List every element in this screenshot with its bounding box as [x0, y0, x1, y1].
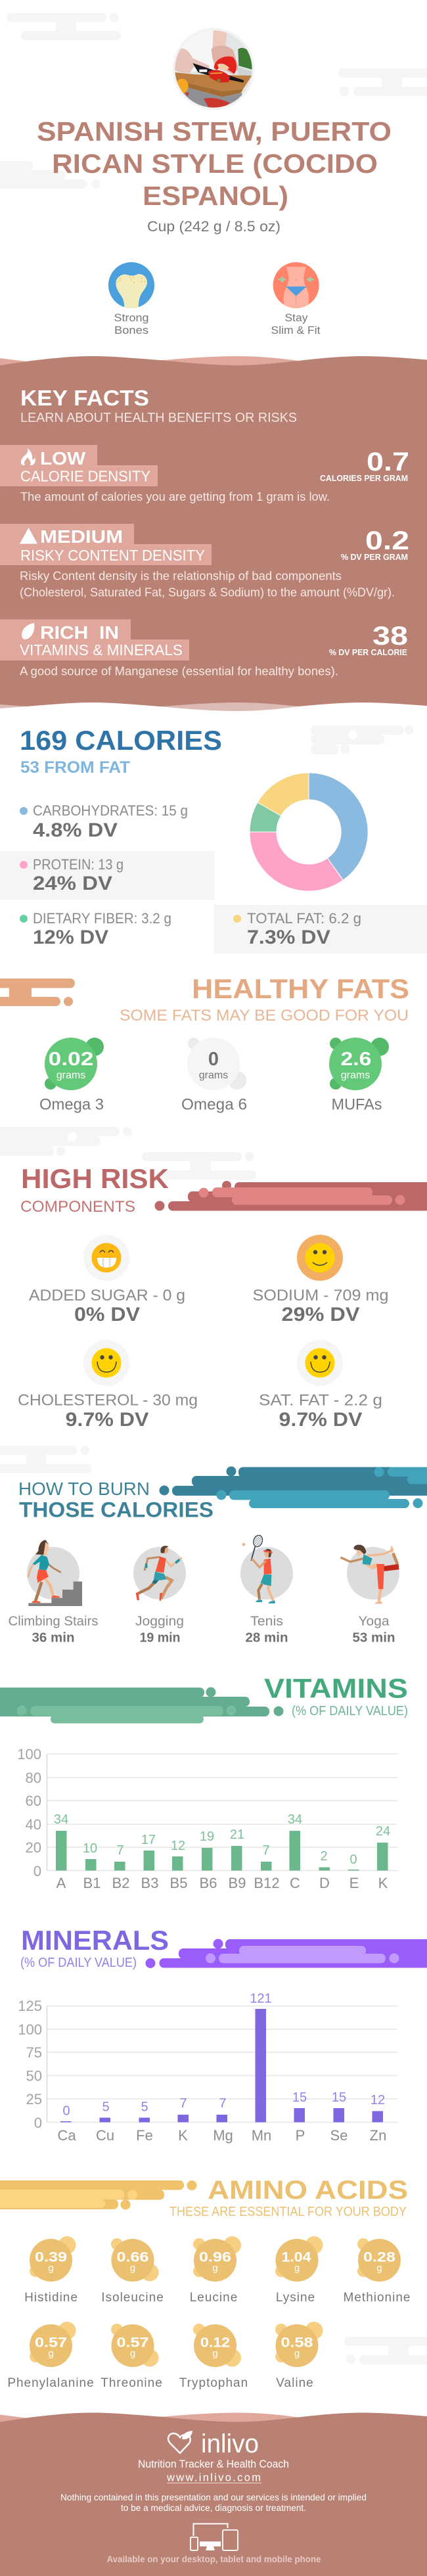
- disclaimer: to be a medical advice, diagnosis or treatment.: [121, 2502, 306, 2513]
- subheading: healthy fats: SOME FATS MAY BE GOOD FOR YOU: [120, 1007, 409, 1024]
- amino acid: threonine: Threonine: [101, 2376, 163, 2390]
- risk item: saturated fat: 9.7% DV: [279, 1409, 363, 1431]
- amino acid: tryptophan: g: [212, 2348, 218, 2359]
- bar chart: vitamins: B3: [141, 1875, 158, 1891]
- heading: key facts: KEY FACTS: [20, 386, 149, 410]
- amino acid: methionine: [344, 2238, 411, 2305]
- heading: amino acids: AMINO ACIDS: [208, 2176, 408, 2205]
- decoration: healthy fats: [0, 978, 75, 1006]
- decoration: amino acids: [0, 2180, 197, 2209]
- value: calories per gram: 0.7: [367, 448, 409, 476]
- band: rich in vitamins and minerals: VITAMINS & MINERALS: [20, 641, 183, 658]
- description: risky content: Risky Content density is the relationship of bad components: [20, 569, 342, 582]
- label: slim and fit: Slim & Fit: [271, 324, 321, 336]
- heading: 169 calories: 169 CALORIES: [20, 725, 222, 756]
- band: rich in vitamins and minerals: RICH IN: [40, 622, 119, 643]
- label: strong bones: Strong: [114, 311, 148, 324]
- description: risky content: [20, 569, 395, 599]
- amino acid: tryptophan: [179, 2324, 248, 2390]
- description: calorie density: The amount of calories you are getting from 1 gram is low.: [20, 490, 330, 503]
- heading: high risk: HIGH RISK: [21, 1163, 169, 1194]
- amino acid: phenylalanine: Phenylalanine: [7, 2376, 95, 2390]
- badge: omega 3: 0.02: [49, 1049, 93, 1070]
- decoration: vitamins: [0, 1688, 284, 1723]
- risk item: cholesterol: 9.7% DV: [66, 1409, 148, 1431]
- subheading: amino acids: THESE ARE ESSENTIAL FOR YOUR BODY: [169, 2205, 407, 2219]
- bar chart: minerals: 0: [34, 2115, 42, 2131]
- bar chart: vitamins: 7: [116, 1843, 124, 1858]
- badge: mufas: [329, 1038, 389, 1113]
- amino acid: leucine: 0.96: [199, 2250, 231, 2265]
- label: strong bones: Bones: [114, 324, 148, 336]
- donut chart: [250, 773, 368, 891]
- activity: climbing stairs: [8, 1540, 99, 1645]
- subheading: minerals: (% OF DAILY VALUE): [20, 1956, 137, 1970]
- bar chart: vitamins: 0: [349, 1852, 357, 1867]
- title: ESPANOL): [143, 181, 288, 211]
- bar chart: vitamins: 10: [83, 1841, 97, 1856]
- value: dv per calorie: [329, 622, 408, 657]
- value: dv per calorie: 38: [372, 622, 408, 651]
- amino acid: lysine: 1.04: [281, 2250, 311, 2265]
- bar chart: vitamins: 24: [376, 1824, 390, 1839]
- risk item: added sugar: ADDED SUGAR - 0 g: [29, 1287, 185, 1304]
- amino acid: valine: Valine: [276, 2376, 314, 2390]
- amino acid: tryptophan: 0.12: [200, 2335, 230, 2350]
- amino acid: phenylalanine: [7, 2322, 95, 2390]
- badge: omega 3: grams: [56, 1070, 85, 1081]
- heading: minerals: MINERALS: [21, 1925, 169, 1956]
- bar chart: vitamins: B9: [229, 1875, 246, 1891]
- risk item: cholesterol: [18, 1340, 198, 1431]
- badge: mufas: 2.6: [340, 1049, 372, 1070]
- risk item: sodium: SODIUM - 709 mg: [252, 1287, 389, 1304]
- bar chart: vitamins: [17, 1746, 397, 1891]
- disclaimer: Nothing contained in this presentation and our services is intended or implied: [60, 2492, 367, 2502]
- stat: protein: PROTEIN: 13 g: [33, 856, 124, 873]
- bar chart: vitamins: E: [349, 1875, 359, 1891]
- bar chart: vitamins: B2: [112, 1875, 129, 1891]
- bar chart: minerals: 100: [18, 2021, 42, 2038]
- bar chart: minerals: 12: [371, 2093, 385, 2107]
- subheading: 53 from fat: 53 FROM FAT: [20, 758, 130, 777]
- stat: protein: [0, 851, 214, 900]
- badge: omega 3: [39, 1038, 104, 1113]
- badge: omega 6: Omega 6: [181, 1096, 247, 1113]
- activity: jogging: Jogging: [135, 1614, 184, 1628]
- bar chart: vitamins: 12: [171, 1839, 185, 1853]
- bar chart: vitamins: 7: [262, 1843, 270, 1858]
- bar chart: vitamins: B6: [200, 1875, 217, 1891]
- stat: carbohydrates: [20, 802, 188, 841]
- description: risky content: (Cholesterol, Saturated Fat, Sugars & Sodium) to the amount (%DV/gr).: [20, 586, 395, 599]
- risk item: saturated fat: SAT. FAT - 2.2 g: [259, 1392, 382, 1409]
- bar chart: minerals: 7: [179, 2096, 187, 2111]
- bar chart: vitamins: 19: [200, 1829, 214, 1844]
- bar chart: vitamins: 0: [34, 1863, 41, 1879]
- amino acid: histidine: Histidine: [24, 2291, 78, 2305]
- activity: tennis: 28 min: [246, 1631, 288, 1645]
- risk item: sodium: [252, 1235, 389, 1325]
- website: www.inlivo.com: [166, 2472, 261, 2484]
- activity: tennis: Tenis: [250, 1614, 283, 1628]
- logo: inlivo: [168, 2429, 259, 2458]
- bar chart: minerals: K: [178, 2127, 188, 2144]
- amino acid: valine: [275, 2322, 323, 2390]
- risk item: added sugar: [29, 1235, 185, 1325]
- description: rich in: A good source of Manganese (essential for healthy bones).: [20, 665, 338, 678]
- bar chart: minerals: 75: [26, 2044, 42, 2061]
- bar chart: vitamins: 60: [26, 1793, 41, 1809]
- icon: leaf: [22, 623, 34, 639]
- risk item: cholesterol: CHOLESTEROL - 30 mg: [18, 1392, 198, 1409]
- stat: total fat: [214, 905, 427, 954]
- availability note: Available on your desktop, tablet and mobile phone: [106, 2554, 321, 2564]
- activity: yoga: [340, 1545, 399, 1645]
- badge: omega 6: 0: [208, 1049, 219, 1070]
- badge: mufas: MUFAs: [331, 1096, 382, 1113]
- amino acid: methionine: Methionine: [344, 2291, 411, 2305]
- amino acid: histidine: [24, 2236, 78, 2305]
- heading: vitamins: VITAMINS: [264, 1673, 408, 1703]
- icon: slim and fit: [273, 262, 319, 309]
- activity: tennis: [240, 1534, 293, 1645]
- risk item: sodium: 29% DV: [281, 1304, 360, 1325]
- value: dv per calorie: % DV PER CALORIE: [329, 647, 407, 657]
- bar chart: minerals: 7: [219, 2096, 227, 2111]
- bar chart: vitamins: B5: [170, 1875, 187, 1891]
- tagline: Nutrition Tracker & Health Coach: [138, 2458, 289, 2470]
- amino acid: valine: 0.58: [281, 2335, 313, 2350]
- bar chart: vitamins: B1: [83, 1875, 101, 1891]
- amino acid: isoleucine: Isoleucine: [101, 2291, 164, 2305]
- food photo: [173, 28, 254, 110]
- serving size: Cup (242 g / 8.5 oz): [147, 218, 281, 235]
- bar chart: vitamins: 34: [54, 1812, 68, 1827]
- value: dv per gram: [341, 526, 409, 562]
- risk item: saturated fat: [259, 1340, 382, 1431]
- stat: dietary fiber: DIETARY FIBER: 3.2 g: [33, 910, 171, 927]
- band: medium risky content density: [0, 524, 212, 565]
- badge: omega 3: Omega 3: [39, 1096, 104, 1113]
- band: low calorie density: CALORIE DENSITY: [20, 468, 150, 485]
- amino acid: threonine: 0.57: [117, 2335, 148, 2350]
- heading: how to burn: HOW TO BURN: [18, 1479, 150, 1499]
- bar chart: minerals: Mn: [252, 2127, 271, 2144]
- badge: omega 6: [181, 1038, 247, 1113]
- stat: dietary fiber: [20, 910, 171, 948]
- logo: inlivo: inlivo: [201, 2429, 259, 2458]
- label: low: LOW: [40, 448, 86, 469]
- bar chart: minerals: Fe: [136, 2127, 153, 2144]
- badge: omega 6: grams: [199, 1070, 228, 1081]
- decoration: high risk: [155, 1181, 427, 1210]
- amino acid: threonine: [101, 2324, 163, 2390]
- activity: jogging: [133, 1546, 186, 1645]
- stat: carbohydrates: CARBOHYDRATES: 15 g: [33, 802, 188, 819]
- stat: dietary fiber: 12% DV: [33, 927, 108, 948]
- subheading: components: COMPONENTS: [20, 1198, 135, 1216]
- bar chart: vitamins: 34: [288, 1812, 302, 1827]
- bar chart: vitamins: A: [56, 1875, 66, 1891]
- bar chart: vitamins: D: [319, 1875, 330, 1891]
- icon: flame: [21, 448, 35, 465]
- label: strong bones: [114, 311, 148, 336]
- amino acid: tryptophan: Tryptophan: [179, 2376, 248, 2390]
- bar chart: minerals: [18, 1991, 397, 2144]
- bar chart: vitamins: 2: [320, 1849, 328, 1864]
- bar chart: vitamins: B12: [254, 1875, 280, 1891]
- bar chart: minerals: 121: [250, 1991, 272, 2006]
- band: rich in vitamins and minerals: [0, 619, 189, 660]
- amino acid: lysine: Lysine: [276, 2291, 315, 2305]
- bar chart: minerals: 15: [292, 2090, 307, 2105]
- amino acid: lysine: g: [294, 2263, 300, 2274]
- title: [37, 116, 392, 211]
- band: low calorie density: [0, 445, 158, 486]
- amino acid: valine: g: [294, 2348, 300, 2359]
- disclaimer: [60, 2492, 367, 2513]
- heading: healthy fats: HEALTHY FATS: [192, 973, 409, 1004]
- heading: those calories: THOSE CALORIES: [19, 1498, 214, 1522]
- bar chart: minerals: Ca: [57, 2127, 76, 2144]
- bar chart: minerals: 0: [62, 2104, 70, 2119]
- activity: jogging: 19 min: [139, 1631, 180, 1645]
- title: SPANISH STEW, PUERTO: [37, 116, 392, 147]
- subheading: vitamins: (% OF DAILY VALUE): [292, 1704, 408, 1718]
- bar chart: vitamins: 100: [17, 1746, 41, 1762]
- bar chart: minerals: Mg: [213, 2127, 233, 2144]
- bar chart: minerals: Zn: [370, 2127, 386, 2144]
- amino acid: isoleucine: [101, 2238, 164, 2305]
- decoration: burn calories: [159, 1467, 427, 1508]
- bar chart: minerals: 15: [332, 2090, 346, 2105]
- risk item: added sugar: 0% DV: [74, 1304, 140, 1325]
- label: slim and fit: [271, 311, 321, 336]
- bar chart: minerals: 50: [26, 2067, 42, 2084]
- title: RICAN STYLE (COCIDO: [52, 149, 378, 179]
- band: medium risky content density: MEDIUM: [40, 526, 123, 547]
- label: slim and fit: Stay: [285, 311, 308, 324]
- panel: footer: [0, 2413, 427, 2576]
- bar chart: minerals: 5: [102, 2100, 110, 2115]
- value: calories per gram: CALORIES PER GRAM: [320, 473, 408, 483]
- bar chart: minerals: 25: [26, 2091, 42, 2107]
- stat: protein: 24% DV: [33, 873, 112, 894]
- bar chart: vitamins: 20: [26, 1839, 41, 1856]
- amino acid: methionine: 0.28: [363, 2250, 395, 2265]
- bar chart: minerals: Se: [330, 2127, 348, 2144]
- amino acid: phenylalanine: 0.57: [35, 2335, 67, 2350]
- badge: mufas: grams: [341, 1070, 370, 1081]
- amino acid: isoleucine: 0.66: [117, 2250, 148, 2265]
- amino acid: leucine: [190, 2236, 241, 2305]
- activity: yoga: Yoga: [359, 1614, 390, 1628]
- amino acid: methionine: g: [376, 2263, 382, 2274]
- bar chart: vitamins: 17: [141, 1833, 156, 1847]
- icon: devices: [191, 2523, 238, 2550]
- bar chart: vitamins: C: [290, 1875, 300, 1891]
- stat: total fat: 7.3% DV: [247, 927, 330, 948]
- bar chart: minerals: P: [296, 2127, 305, 2144]
- bar chart: vitamins: 21: [230, 1828, 244, 1842]
- bar chart: minerals: Cu: [96, 2127, 114, 2144]
- amino acid: leucine: g: [212, 2263, 218, 2274]
- bar chart: vitamins: 80: [26, 1770, 41, 1786]
- amino acid: histidine: 0.39: [35, 2250, 67, 2265]
- activity: yoga: 53 min: [352, 1631, 395, 1645]
- value: dv per gram: % DV PER GRAM: [341, 552, 408, 562]
- value: dv per gram: 0.2: [365, 526, 409, 555]
- amino acid: isoleucine: g: [130, 2263, 135, 2274]
- amino acid: leucine: Leucine: [190, 2291, 238, 2305]
- subheading: LEARN ABOUT HEALTH BENEFITS OR RISKS: [20, 411, 297, 425]
- bar chart: minerals: 125: [18, 1998, 42, 2014]
- bar chart: vitamins: 40: [26, 1816, 41, 1833]
- amino acid: lysine: [275, 2236, 323, 2305]
- icon: warning: [20, 528, 37, 544]
- stat: total fat: TOTAL FAT: 6.2 g: [247, 910, 361, 927]
- decoration: minerals: [146, 1939, 427, 1968]
- bar chart: minerals: 5: [141, 2100, 148, 2115]
- value: calories per gram: [320, 448, 409, 483]
- icon: strong bones: [108, 262, 154, 309]
- amino acid: threonine: g: [130, 2348, 135, 2359]
- panel: key facts: [0, 356, 427, 720]
- stat: carbohydrates: 4.8% DV: [33, 819, 118, 841]
- band: medium risky content density: RISKY CONTENT DENSITY: [20, 547, 205, 564]
- activity: climbing stairs: Climbing Stairs: [8, 1614, 99, 1628]
- bar chart: vitamins: K: [378, 1875, 388, 1891]
- activity: climbing stairs: 36 min: [32, 1631, 75, 1645]
- amino acid: histidine: g: [48, 2263, 54, 2274]
- amino acid: phenylalanine: g: [48, 2348, 54, 2359]
